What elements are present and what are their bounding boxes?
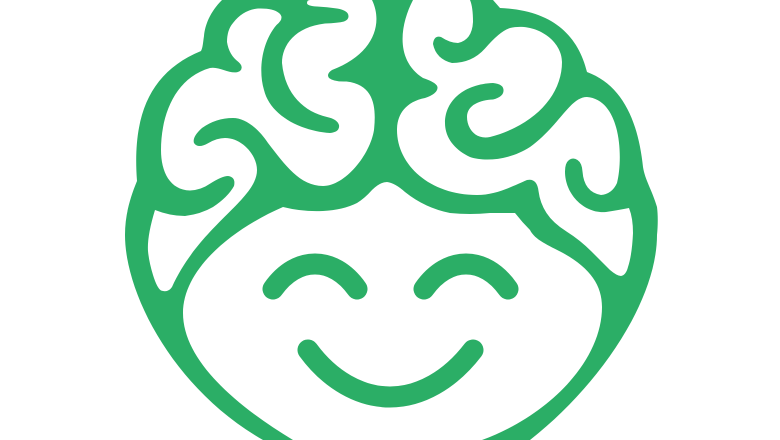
icon: right eye xyxy=(424,264,508,289)
left brain hemisphere folds xyxy=(148,0,376,291)
icon: brain and head outline xyxy=(125,0,658,440)
right brain hemisphere folds xyxy=(397,0,633,276)
icon: left eye xyxy=(273,264,357,289)
icon: smile xyxy=(308,350,473,397)
face area xyxy=(183,182,602,440)
head silhouette xyxy=(125,0,658,440)
